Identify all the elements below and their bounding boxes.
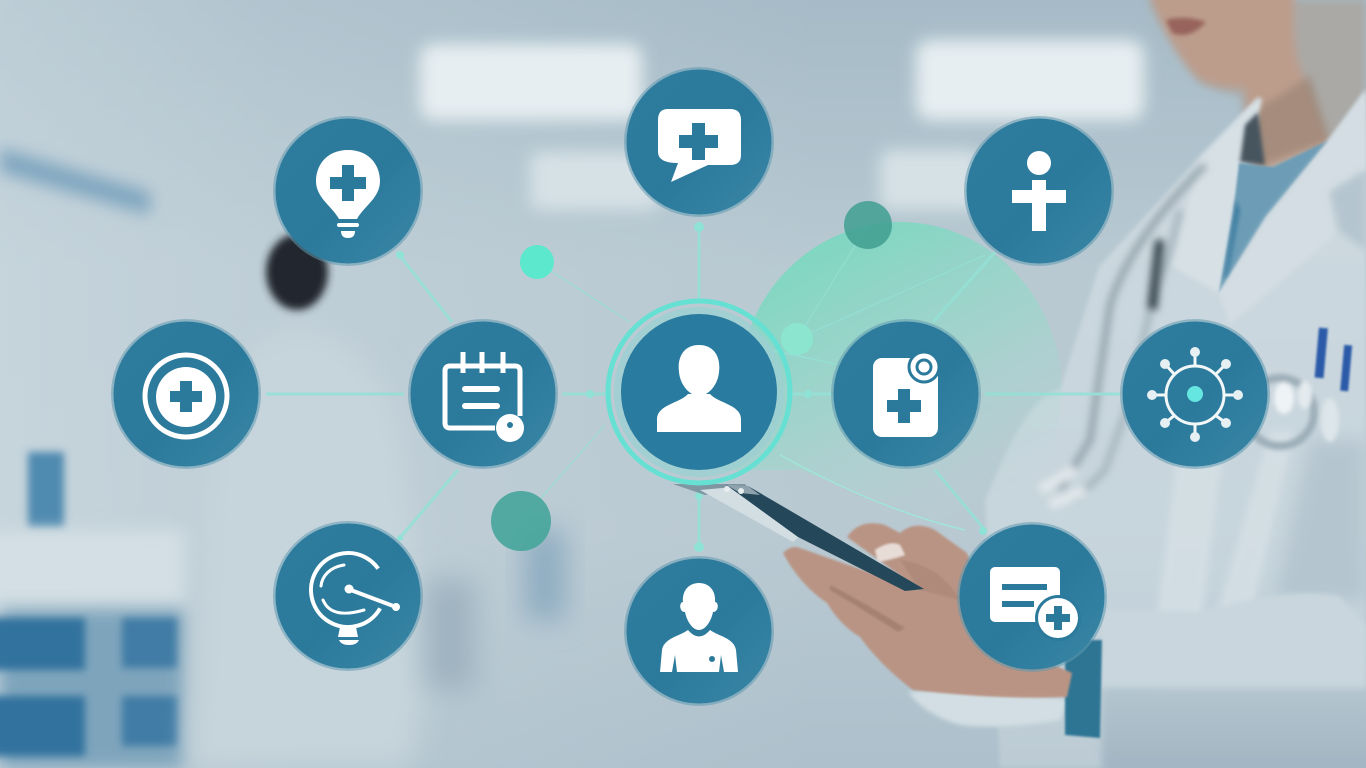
stethoscope chest piece <box>1246 378 1339 446</box>
node: central person hub <box>608 301 790 483</box>
doctor face and neck <box>1148 0 1366 175</box>
coat hem <box>1102 688 1366 768</box>
gauge base <box>338 627 359 645</box>
node: staff person <box>624 556 774 706</box>
connector end dots <box>396 222 987 552</box>
icon: card with plus badge <box>990 567 1081 641</box>
doctor figure <box>985 0 1366 768</box>
icon: person as cross <box>1012 151 1066 231</box>
arc below hub <box>780 455 965 530</box>
icon: lightbulb with plus <box>316 150 380 238</box>
node: person cross <box>964 116 1114 266</box>
node: calendar <box>408 319 558 469</box>
doctor lips <box>1166 18 1206 35</box>
doctor sleeve strip <box>1065 640 1102 738</box>
node: chat plus <box>624 67 774 217</box>
lower coat fold <box>1100 593 1366 700</box>
icon: calendar with badge <box>445 352 524 442</box>
tablet <box>673 484 924 591</box>
scrubs <box>1219 140 1329 293</box>
node: document tag plus <box>831 319 981 469</box>
left lapel <box>1170 97 1262 293</box>
icon: speech bubble with plus <box>658 109 741 182</box>
connector lines <box>266 222 1120 550</box>
node: lightbulb plus <box>273 116 423 266</box>
coat folds <box>1150 430 1295 670</box>
node: molecule network <box>1120 319 1270 469</box>
hand holding tablet <box>783 523 1072 698</box>
icon: person <box>657 345 741 432</box>
node: ring plus <box>111 319 261 469</box>
white coat <box>985 90 1366 768</box>
stethoscope <box>1040 165 1205 505</box>
icon: gauge lightbulb <box>297 539 400 641</box>
node: gauge bulb <box>273 521 423 671</box>
icon: ring and disc with plus <box>145 355 227 437</box>
icon: medical card with plus <box>873 352 939 437</box>
blurred background figure head <box>266 234 328 310</box>
pens in pocket <box>1315 328 1352 391</box>
node: card plus <box>957 522 1107 672</box>
cuff behind hand <box>908 690 1070 727</box>
right lapel <box>1219 90 1366 325</box>
decorative accent dots <box>491 201 892 551</box>
mint dome glow <box>720 222 1062 535</box>
icon: virus network <box>1147 347 1243 442</box>
neck shadow <box>1240 112 1265 165</box>
icon: staff bust <box>660 583 738 672</box>
